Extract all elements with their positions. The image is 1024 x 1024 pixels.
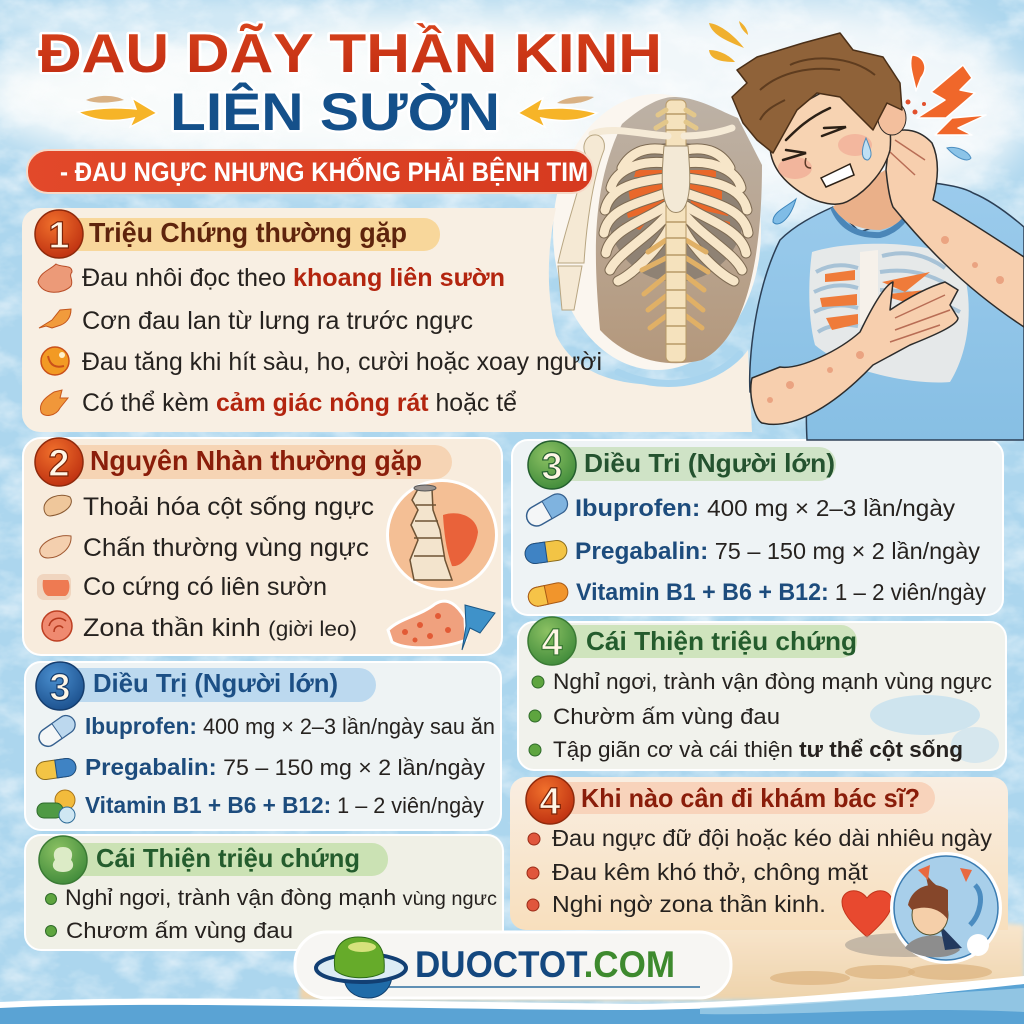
icon: white capsule — [523, 490, 571, 530]
arrow: left pointing right — [78, 96, 157, 127]
illustration: patient in circle — [845, 852, 1002, 964]
icon: vertebra — [44, 495, 71, 516]
illustration: boy in pain — [732, 33, 1024, 440]
icon: blue drop left — [773, 199, 796, 224]
heading: relief — [39, 836, 388, 884]
text: warning 2: Đau kêm khó thở, chông mặt — [552, 859, 869, 885]
icon: yellow pain marks — [709, 21, 748, 62]
text: warning 1: Đau ngực đữ đội hoặc kéo dài nhiêu ngày — [552, 825, 993, 851]
icon: yellow blue capsule — [35, 757, 77, 781]
heading: relief: Cái Thiện triệu chứng — [96, 843, 360, 873]
icon: heart — [842, 891, 892, 937]
icon: breathing — [41, 347, 69, 375]
icon: injury — [40, 536, 71, 558]
text: vitamins: Vitamin B1 + B6 + B12: 1 – 2 viên/ngày — [85, 792, 484, 818]
heading: symptoms: Triệu Chứng thường gặp — [89, 217, 407, 248]
panel: relief (left) — [25, 835, 503, 950]
hair — [732, 33, 902, 153]
heading: treatment — [36, 662, 376, 710]
panel: symptoms — [22, 208, 752, 432]
text: warning 3: Nghi ngờ zona thần kinh. — [552, 891, 826, 917]
bullet — [529, 710, 541, 722]
text: vitamins: Vitamin B1 + B6 + B12: 1 – 2 viên/ngày — [576, 579, 986, 606]
title: LIÊN SƯỜN — [170, 81, 500, 142]
shirt — [750, 183, 1024, 440]
heading: symptoms: 1 — [48, 215, 70, 257]
icon: spreading arrow — [39, 309, 71, 328]
bullet — [532, 676, 544, 688]
title — [38, 22, 662, 142]
panel: when to see a doctor — [510, 776, 1008, 930]
raised arm — [886, 130, 1024, 327]
text: cause 3: Co cứng có liên sườn — [83, 573, 327, 601]
ribs on chest — [809, 244, 969, 383]
orange pain areas — [622, 170, 730, 232]
heading: treatment: 3 — [541, 446, 563, 488]
icon: lightning pain — [911, 55, 986, 135]
heading: treatment: Diều Tri (Người lớn) — [584, 448, 835, 478]
subtitle banner: - ĐAU NGỰC NHƯNG KHỐNG PHẢI BỆNH TIM — [60, 155, 588, 187]
head — [770, 88, 891, 204]
text: symptom 2: Cơn đau lan từ lưng ra trước ngực — [82, 307, 473, 335]
text: pregabalin: Pregabalin: 75 – 150 mg × 2 lần/ngày — [575, 538, 980, 565]
panel: treatment (left) — [25, 662, 501, 830]
logo: DUOCTOT.COM: DUOCTOT.COM — [415, 944, 675, 985]
illustration: skeleton — [553, 94, 762, 370]
heading: relief — [528, 617, 857, 665]
heading: causes: Nguyên Nhàn thường gặp — [90, 445, 422, 476]
background: sandy beach — [0, 918, 1024, 1024]
logo icon — [316, 937, 406, 998]
heading: doctor: 4 — [539, 781, 561, 823]
icon: blue drop right — [947, 147, 971, 160]
bullet — [527, 899, 539, 911]
heading: doctor: Khi nào cân đi khám bác sĩ? — [581, 783, 920, 813]
bullet — [46, 894, 56, 904]
left arm and hand on chest — [751, 282, 958, 424]
text: relief 3: Tập giãn cơ và cái thiện tư thể cột sống — [553, 737, 963, 762]
text: cause 4: Zona thần kinh (giời leo) — [83, 614, 357, 642]
text: symptom 3: Đau tăng khi hít sàu, ho, cười hoặc xoay người — [82, 348, 602, 376]
sweat drop — [862, 138, 871, 160]
spine — [642, 100, 708, 362]
heading: treatment: Diều Trị (Người lớn) — [93, 668, 338, 698]
sternum — [662, 146, 690, 212]
icon: vitamins — [37, 790, 75, 823]
icon: red dots — [906, 100, 926, 114]
icon: shingles — [42, 611, 72, 641]
rib cage — [604, 149, 748, 281]
bullet — [528, 833, 540, 845]
icon: stiff muscle — [37, 574, 71, 600]
illustration: spine inflammation — [386, 479, 498, 591]
text: symptom 4: Có thể kèm cảm giác nông rát hoặc tể — [82, 389, 517, 417]
heading: treatment: 3 — [49, 667, 71, 709]
heading: symptoms — [35, 210, 440, 258]
text: relief 2: Chườm ấm vùng đau — [553, 704, 780, 729]
panel: treatment (right) — [512, 440, 1003, 615]
icon: flame — [40, 390, 68, 415]
text: cause 1: Thoải hóa cột sống ngực — [83, 493, 374, 521]
logo: DUOCTOT.COM — [295, 932, 731, 998]
heading: treatment — [528, 441, 836, 489]
dark chest cavity — [608, 142, 744, 282]
text: relief 1: Nghỉ ngơi, trành vận đòng mạnh vùng ngưc — [65, 885, 497, 910]
title: ĐAU DÃY THẦN KINH — [38, 22, 662, 84]
text: relief 1: Nghỉ ngơi, trành vận đòng mạnh vùng ngực — [553, 669, 992, 694]
text: relief 2: Chươm ấm vùng đau — [66, 918, 293, 943]
icon: pain burst — [38, 264, 72, 292]
bullet — [527, 867, 539, 879]
text: pregabalin: Pregabalin: 75 – 150 mg × 2 lần/ngày — [85, 754, 485, 780]
icon: yellow blue capsule — [524, 539, 568, 565]
text: ibuprofen: Ibuprofen: 400 mg × 2–3 lần/ngày — [575, 495, 956, 522]
panel: causes — [23, 438, 502, 655]
face — [783, 108, 846, 160]
text: cause 2: Chấn thường vùng ngực — [83, 534, 369, 562]
text: symptom 1: Đau nhôi đọc theo khoang liên sườn — [82, 264, 505, 292]
subtitle banner — [27, 150, 593, 193]
arrow: right pointing left — [518, 96, 597, 127]
humerus — [558, 135, 604, 263]
heading: relief: Cái Thiện triệu chứng — [586, 626, 857, 656]
torso silhouette — [596, 97, 762, 363]
heading: doctor — [526, 776, 935, 824]
icon: white capsule — [35, 712, 79, 750]
bullet — [529, 744, 541, 756]
panel: relief (right) — [518, 617, 1006, 770]
text: ibuprofen: Ibuprofen: 400 mg × 2–3 lần/ngày sau ăn — [85, 713, 495, 739]
illustration: shingles rash with pin — [388, 601, 495, 650]
heading: causes: 2 — [48, 443, 70, 485]
bullet — [46, 926, 56, 936]
clavicles — [592, 128, 732, 136]
icon: orange capsule — [527, 581, 570, 608]
heading: relief: 4 — [541, 622, 563, 664]
heading: causes — [35, 438, 452, 486]
